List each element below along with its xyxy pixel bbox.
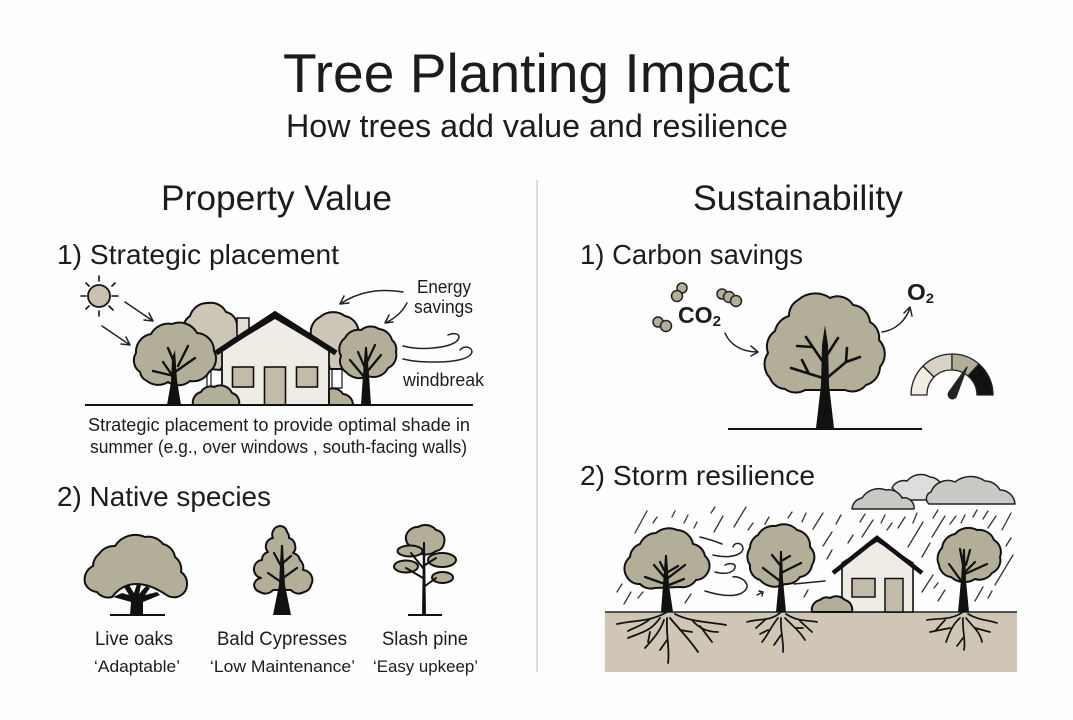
ground: [605, 612, 1017, 672]
subtitle: How trees add value and resilience: [286, 108, 788, 144]
icon: live oak: [85, 535, 187, 615]
label: o2: O: [907, 279, 925, 305]
arrows: sun rays: [102, 302, 153, 345]
icon: sun: [81, 276, 118, 316]
storm shrub: [812, 596, 852, 612]
label: bald cypresses: ‘Low Maintenance’: [210, 657, 355, 676]
label: slash pine: ‘Easy upkeep’: [373, 657, 478, 676]
panel: property value: [57, 179, 485, 676]
illustration: storm scene: [605, 474, 1017, 672]
wind swirls: [700, 537, 825, 596]
arrow: oxygen out of tree: [882, 307, 912, 332]
label: o2: 2: [926, 290, 934, 306]
tree: front right: [339, 326, 396, 405]
label: bald cypresses: [210, 629, 355, 676]
storm tree 1: [617, 528, 726, 663]
title: Tree Planting Impact: [283, 42, 790, 104]
label: energy savings: Energy: [417, 277, 471, 297]
clouds: [852, 474, 1015, 509]
illustration: house with shade trees: [81, 276, 485, 405]
label: bald cypresses: Bald Cypresses: [217, 629, 347, 650]
subheading: carbon savings: 1) Carbon savings: [580, 239, 803, 270]
house: [216, 314, 336, 405]
gauge: [911, 354, 993, 399]
rain: [617, 507, 1013, 604]
heading: property value: Property Value: [161, 179, 392, 218]
icon: slash pine: [394, 525, 456, 615]
label: slash pine: Slash pine: [382, 629, 468, 650]
panel: sustainability: [580, 179, 1017, 672]
tree: back left: [183, 303, 238, 390]
storm tree 2: [747, 524, 817, 652]
tree: front left: [134, 323, 216, 405]
heading: sustainability: Sustainability: [693, 179, 903, 218]
storm house: [833, 538, 922, 612]
icon: co2 molecules: [653, 283, 742, 332]
caption: strategic placement: summer (e.g., over windows , south-facing walls): [90, 437, 467, 457]
label: energy savings: savings: [414, 297, 473, 317]
shrubs: [193, 385, 353, 405]
icon: bald cypress: [254, 526, 312, 615]
label: energy savings: [414, 277, 473, 317]
label: windbreak: windbreak: [402, 369, 485, 390]
label: live oaks: ‘Adaptable’: [94, 657, 180, 676]
label: live oaks: [94, 629, 180, 676]
caption: strategic placement: Strategic placement to provide optimal shade in: [88, 415, 470, 435]
arrows: energy savings: [340, 290, 407, 323]
icon: wind lines: [403, 334, 472, 362]
ground line: [85, 404, 473, 406]
label: slash pine: [373, 629, 478, 676]
subheading: strategic placement: 1) Strategic placement: [57, 239, 339, 270]
tree: back right: [311, 312, 362, 388]
label: live oaks: Live oaks: [95, 629, 173, 650]
label: co2: CO: [678, 302, 712, 328]
storm tree 3: [927, 528, 1001, 650]
caption: strategic placement: [88, 415, 470, 457]
illustration: large tree: [728, 293, 922, 429]
label: co2: 2: [713, 313, 721, 330]
subheading: native species: 2) Native species: [57, 481, 271, 512]
arrow: co2 into tree: [725, 333, 758, 356]
subheading: storm resilience: 2) Storm resilience: [580, 460, 815, 491]
